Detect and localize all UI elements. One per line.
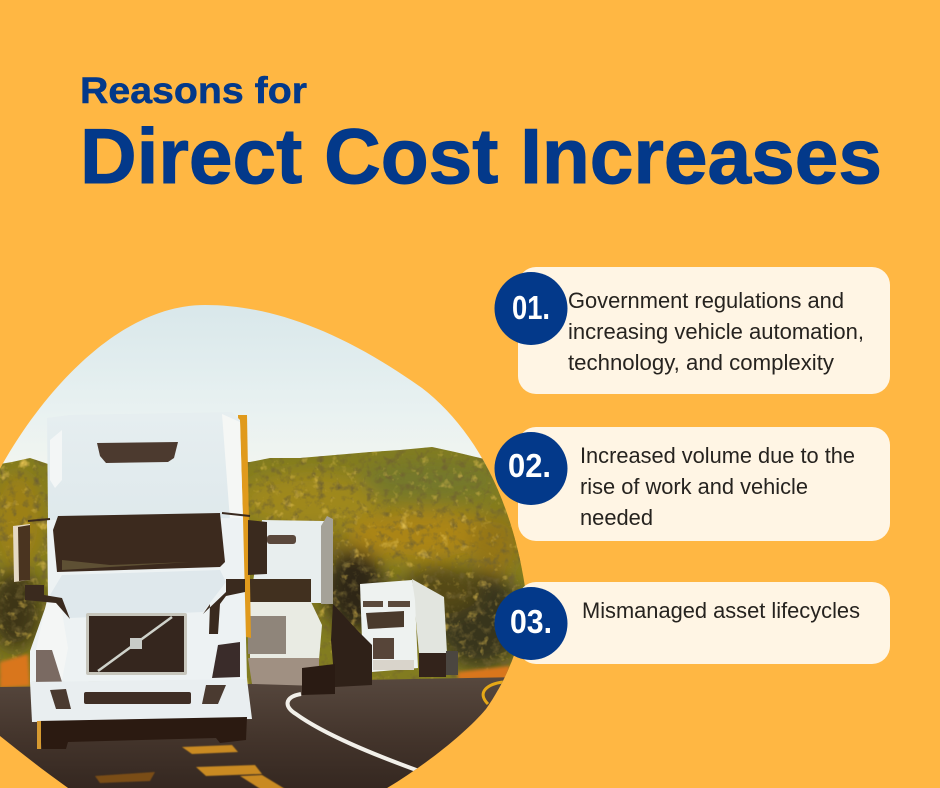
card 3 text: Mismanaged asset lifecycles xyxy=(582,598,860,623)
bumper xyxy=(30,679,252,722)
mirrors xyxy=(13,524,30,582)
truck 2 xyxy=(248,516,372,695)
title: Reasons for xyxy=(80,70,307,111)
truck 3 xyxy=(360,579,458,677)
trailer stripe xyxy=(238,415,251,638)
card 2 text: Increased volume due to the xyxy=(580,443,855,468)
orange roadside brush xyxy=(0,654,510,688)
truck 1 xyxy=(13,412,267,749)
road lines xyxy=(288,694,419,771)
number badge 01: 01. xyxy=(512,289,550,326)
card 1 text xyxy=(568,288,864,375)
card 2 text xyxy=(580,443,855,530)
photo: trucks on a road in a blob shape xyxy=(0,300,530,788)
title xyxy=(80,70,882,200)
headlights xyxy=(36,650,62,684)
card 3 xyxy=(494,582,890,664)
title: Direct Cost Increases xyxy=(80,112,882,200)
number badge 02 xyxy=(494,432,568,505)
fairing xyxy=(47,412,243,520)
number badge 02: 02. xyxy=(508,447,551,484)
card 2 xyxy=(494,427,890,541)
underside and wheels xyxy=(38,717,247,749)
card 2 text: needed xyxy=(580,505,653,530)
number badge 03: 03. xyxy=(510,603,552,640)
cab side and hood xyxy=(30,518,247,682)
road xyxy=(0,677,520,788)
grille xyxy=(86,613,187,675)
windshield xyxy=(53,513,225,572)
card 2 text: rise of work and vehicle xyxy=(580,474,808,499)
roof vent xyxy=(97,442,178,463)
sunlit road patches xyxy=(95,745,295,788)
card 1 text: increasing vehicle automation, xyxy=(568,319,864,344)
sky xyxy=(0,300,530,480)
card 1 text: Government regulations and xyxy=(568,288,844,313)
forest xyxy=(0,440,530,690)
card 1 text: technology, and complexity xyxy=(568,350,834,375)
card 1 xyxy=(494,267,890,394)
side arms xyxy=(25,585,70,619)
number badge 01 xyxy=(494,272,568,345)
number badge 03 xyxy=(494,587,568,660)
